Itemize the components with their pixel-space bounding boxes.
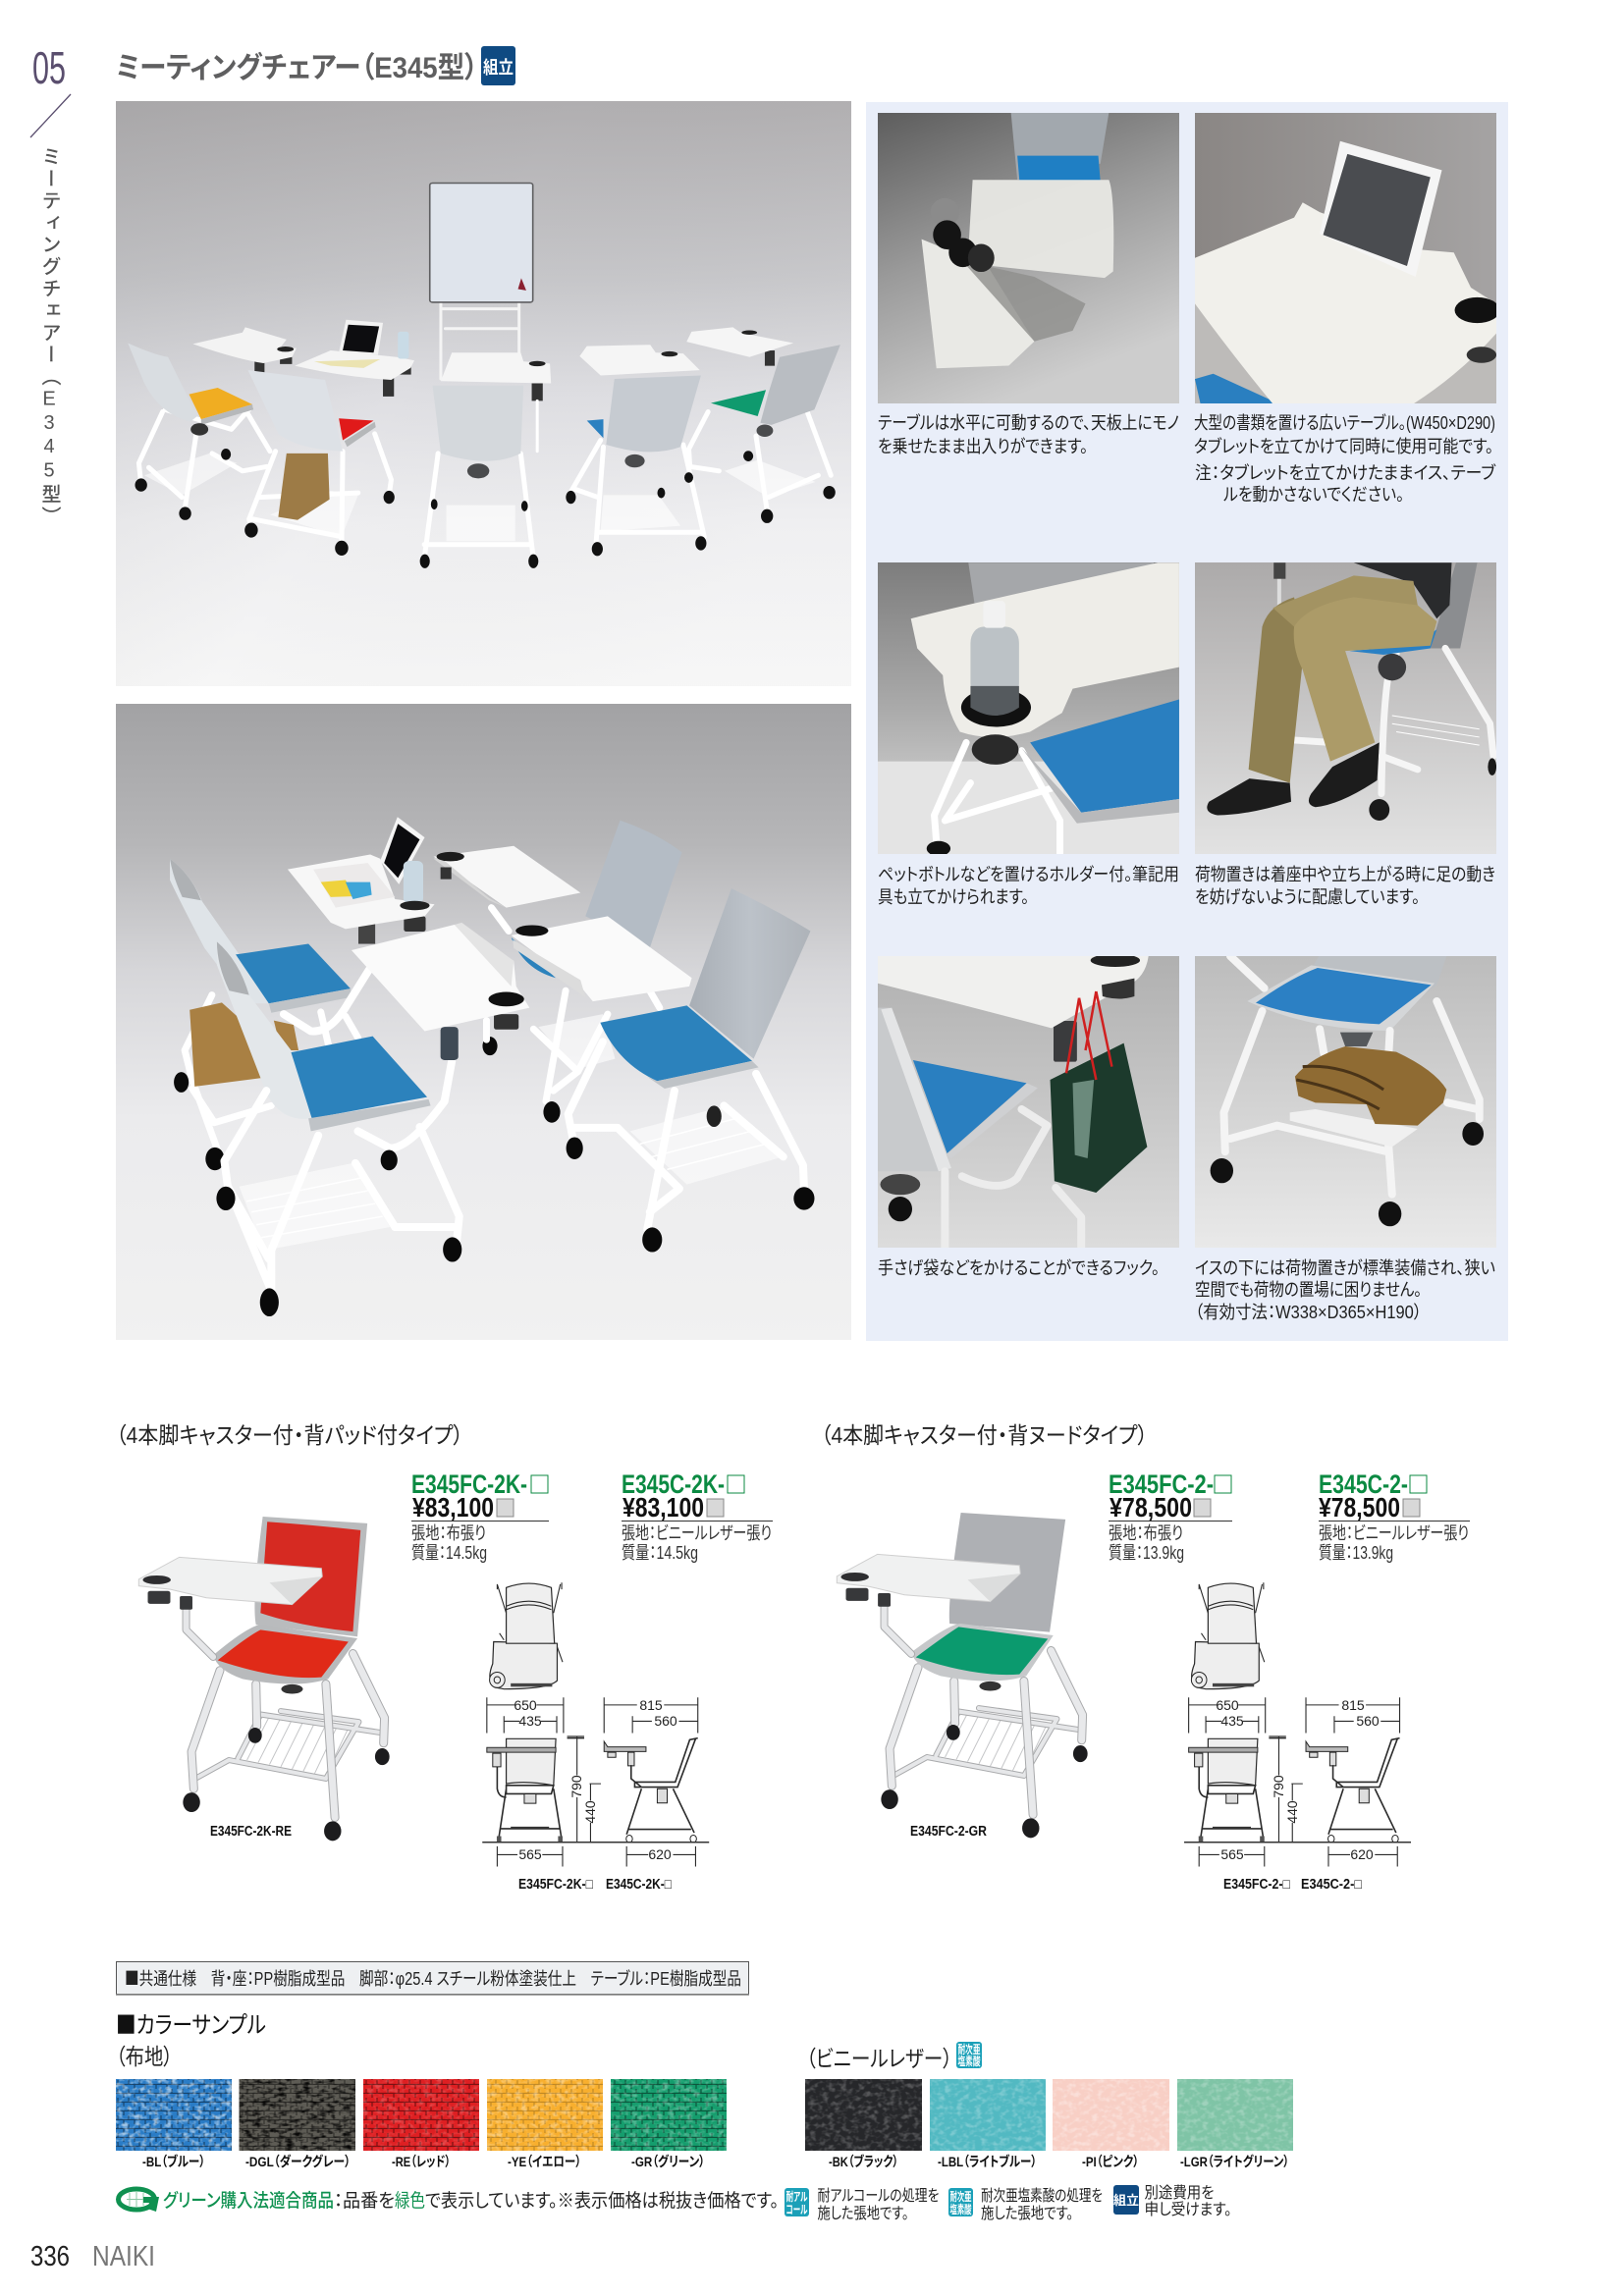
- whiteboard: [430, 184, 533, 379]
- label: padded type drawing codes: E345FC-2K-□: [518, 1877, 593, 1893]
- swatch: pink: [1053, 2079, 1169, 2151]
- section number 05: 05: [32, 42, 66, 93]
- badge: alcohol resistant: 耐アル: [785, 2190, 808, 2204]
- technical drawing: padded type: 620: [648, 1846, 672, 1862]
- section divider slash: [30, 94, 71, 137]
- page number: 336: [30, 2241, 70, 2272]
- swatch labels: vinyl leather: [829, 2154, 1289, 2169]
- swatches: fabric: [116, 2079, 727, 2151]
- swatch labels: fabric: -RE（レッド）: [392, 2154, 451, 2169]
- photo: chairs in a circle with whiteboard: [116, 101, 851, 686]
- caption: sliding table: を乗せたまま出入りができます。: [878, 437, 1088, 456]
- caption: hook: 手さげ袋などをかけることができるフック。: [878, 1258, 1160, 1278]
- product E345C-2: ¥78,500: [1319, 1492, 1400, 1522]
- note: hypochlorite resistant: 施した張地です。: [981, 2205, 1073, 2222]
- badge: hypochlorite resistant legend: [948, 2188, 973, 2216]
- badge: assembly: 組立: [483, 58, 514, 78]
- detail photo: wide table with tablet: [1195, 113, 1500, 403]
- badge: assembly legend: 組立: [1113, 2193, 1139, 2208]
- swatch: red: [363, 2079, 479, 2151]
- product photo: red chair: [138, 1517, 390, 1841]
- technical drawing: padded type: 650: [514, 1697, 537, 1713]
- caption: wide table: タブレットを立てかけて同時に使用可能です。: [1194, 436, 1493, 456]
- technical drawing: padded type: 440: [582, 1800, 598, 1824]
- front right chair: [567, 888, 815, 1253]
- technical drawing: nude type: 565: [1220, 1846, 1244, 1862]
- caption: luggage rack clearance: を妨げないように配慮しています。: [1195, 887, 1420, 907]
- chair centre: [420, 352, 551, 568]
- caption: wide table: [1194, 412, 1496, 505]
- product E345FC-2: 質量：13.9kg: [1109, 1543, 1184, 1563]
- detail photo: under-seat luggage rack: [1195, 956, 1496, 1248]
- label: nude type drawing codes: E345C-2-□: [1301, 1877, 1362, 1893]
- note: hypochlorite resistant: [981, 2187, 1103, 2222]
- technical drawing: padded type: 560: [654, 1713, 677, 1729]
- swatch labels: fabric: -YE（イエロー）: [508, 2154, 581, 2169]
- common specification bar: [116, 1961, 749, 1995]
- badge: alcohol resistant: [785, 2188, 809, 2216]
- caption: sliding table: [878, 412, 1179, 456]
- badge: assembly legend: [1113, 2185, 1139, 2215]
- common specification bar: ■共通仕様 背・座：PP樹脂成型品 脚部：φ25.4 スチール粉体塗装仕上 テーブル：PE樹脂成型品: [125, 1965, 741, 1991]
- caption: luggage rack: イスの下には荷物置きが標準装備され、狭い: [1195, 1258, 1495, 1278]
- swatch labels: vinyl leather: -PI（ピンク）: [1082, 2154, 1139, 2169]
- swatch labels: vinyl leather: -BK（ブラック）: [829, 2154, 898, 2169]
- technical drawing: nude type: 650: [1216, 1697, 1239, 1713]
- swatches: vinyl leather: [805, 2079, 1293, 2151]
- swatch labels: fabric: -DGL（ダークグレー）: [245, 2154, 351, 2169]
- note: assembly: [1145, 2184, 1231, 2218]
- product E345C-2K: E345C-2K-: [622, 1469, 725, 1499]
- product E345FC-2K: E345FC-2K-: [411, 1469, 527, 1499]
- heading: padded back type: （4本脚キャスター付・背パッド付タイプ）: [116, 1422, 463, 1448]
- detail photo: legroom: [1195, 562, 1496, 854]
- table with tablet: [288, 817, 435, 944]
- green purchasing note: グリーン購入法適合商品: [163, 2190, 334, 2212]
- note: assembly: 申し受けます。: [1145, 2201, 1231, 2218]
- panel: feature details: [866, 102, 1508, 1341]
- caption: sliding table: テーブルは水平に可動するので、天板上にモノ: [878, 412, 1179, 433]
- green purchasing note: 緑色: [395, 2190, 425, 2212]
- caption: luggage rack clearance: 荷物置きは着座中や立ち上がる時に足の動き: [1195, 865, 1495, 884]
- product E345C-2: [1319, 1469, 1470, 1563]
- product E345FC-2K: [411, 1469, 549, 1563]
- green purchasing note: [163, 2190, 779, 2212]
- note: hypochlorite resistant: 耐次亜塩素酸の処理を: [981, 2187, 1103, 2205]
- label: green chair code: E345FC-2-GR: [910, 1824, 987, 1840]
- technical drawing: padded type: 435: [518, 1713, 542, 1729]
- green purchasing note: で表示しています。※表示価格は税抜き価格です。: [425, 2190, 779, 2212]
- heading: vinyl leather: （ビニールレザー）: [806, 2046, 952, 2071]
- heading: fabric: （布地）: [116, 2044, 173, 2069]
- icon: green purchasing logo: [118, 2189, 159, 2212]
- caption: luggage rack: （有効寸法：W338×D365×H190）: [1195, 1303, 1422, 1322]
- badge: hypochlorite resistant legend: 塩素酸: [950, 2202, 972, 2216]
- product E345FC-2K: 張地：布張り: [411, 1523, 486, 1543]
- product photo: green chair: [837, 1513, 1088, 1838]
- swatch: blue: [116, 2079, 232, 2151]
- technical drawing: padded type: [482, 1582, 709, 1866]
- technical drawing: nude type: [1184, 1582, 1411, 1866]
- swatch labels: fabric: [142, 2154, 705, 2169]
- caption: luggage rack: 空間でも荷物の置場に困りません。: [1195, 1280, 1422, 1300]
- caption: wide table: ルを動かさないでください。: [1223, 485, 1404, 505]
- technical drawing: nude type: 435: [1220, 1713, 1244, 1729]
- heading: colour samples: ■カラーサンプル: [116, 2005, 266, 2040]
- swatch: yellow: [487, 2079, 603, 2151]
- badge: hypochlorite resistant: 耐次亜: [958, 2042, 980, 2056]
- product E345FC-2K: 質量：14.5kg: [411, 1543, 487, 1563]
- detail photo: bottle holder: [878, 562, 1179, 856]
- caption: wide table: 大型の書類を置ける広いテーブル。(W450×D290): [1194, 412, 1495, 433]
- badge: hypochlorite resistant: 塩素酸: [958, 2054, 980, 2068]
- caption: bottle holder: [878, 865, 1179, 907]
- product E345C-2K: [622, 1469, 773, 1563]
- note: alcohol resistant: 施した張地です。: [817, 2205, 909, 2222]
- technical drawing: nude type: 620: [1350, 1846, 1374, 1862]
- heading: nude back type: （4本脚キャスター付・背ヌードタイプ）: [821, 1422, 1148, 1448]
- detail photo: bag hook: [878, 954, 1179, 1248]
- green purchasing note: ：品番を: [334, 2190, 395, 2212]
- caption: luggage rack clearance: [1195, 865, 1495, 907]
- product E345C-2K: 質量：14.5kg: [622, 1543, 698, 1563]
- product E345FC-2: ¥78,500: [1110, 1492, 1192, 1522]
- badge: alcohol resistant: コール: [785, 2203, 808, 2216]
- product E345C-2: E345C-2-: [1319, 1469, 1408, 1499]
- chair green: [684, 327, 840, 523]
- brand name: NAIKI: [92, 2241, 155, 2272]
- detail photo: sliding table: [878, 113, 1179, 403]
- product E345FC-2: 張地：布張り: [1109, 1523, 1183, 1543]
- swatch labels: vinyl leather: -LGR（ライトグリーン）: [1180, 2154, 1289, 2169]
- technical drawing: padded type: 565: [518, 1846, 542, 1862]
- badge: assembly: [481, 46, 515, 85]
- chair blue: [566, 345, 706, 556]
- label: nude type drawing codes: [1223, 1877, 1362, 1893]
- product E345C-2K: 張地：ビニールレザー張り: [622, 1523, 772, 1543]
- front left chair: [216, 941, 461, 1316]
- right table: [512, 916, 692, 1001]
- swatch: dark grey: [240, 2079, 355, 2151]
- chair red with bag: [244, 320, 414, 556]
- product E345FC-2K: ¥83,100: [412, 1492, 494, 1522]
- label: nude type drawing codes: E345FC-2-□: [1223, 1877, 1290, 1893]
- technical drawing: nude type: 790: [1271, 1775, 1286, 1798]
- far right chair: [486, 821, 681, 1123]
- photo: five chairs from above: [116, 704, 851, 1340]
- product E345FC-2: E345FC-2-: [1109, 1469, 1214, 1499]
- swatch labels: vinyl leather: -LBL（ライトブルー）: [938, 2154, 1037, 2169]
- badge: hypochlorite resistant legend: 耐次亜: [950, 2189, 972, 2204]
- label: padded type drawing codes: E345C-2K-□: [606, 1877, 672, 1893]
- product E345FC-2: [1109, 1469, 1232, 1563]
- caption: luggage rack: [1195, 1258, 1495, 1322]
- swatch: black: [805, 2079, 922, 2151]
- caption: bottle holder: 具も立てかけられます。: [878, 887, 1029, 907]
- caption: wide table: 注：タブレットを立てかけたままイス、テーブ: [1195, 462, 1496, 483]
- label: padded type drawing codes: [518, 1877, 672, 1893]
- vertical section title: ミーティングチェアー（E345型）: [38, 146, 61, 528]
- title: ミーティングチェアー（E345型）: [116, 52, 478, 84]
- product E345C-2: 質量：13.9kg: [1319, 1543, 1393, 1563]
- label: red chair code: E345FC-2K-RE: [210, 1824, 292, 1840]
- product E345C-2K: ¥83,100: [623, 1492, 704, 1522]
- product E345C-2: 張地：ビニールレザー張り: [1319, 1523, 1469, 1543]
- technical drawing: padded type: 790: [568, 1775, 584, 1798]
- technical drawing: nude type: 815: [1341, 1697, 1365, 1713]
- chair yellow: [128, 327, 297, 520]
- note: alcohol resistant: 耐アルコールの処理を: [817, 2187, 940, 2205]
- technical drawing: nude type: 440: [1284, 1800, 1300, 1824]
- centre table: [352, 923, 529, 1060]
- technical drawing: padded type: 815: [639, 1697, 663, 1713]
- note: alcohol resistant: [817, 2187, 940, 2222]
- swatch: light blue: [930, 2079, 1046, 2151]
- swatch: light green: [1177, 2079, 1293, 2151]
- swatch labels: fabric: -BL（ブルー）: [142, 2154, 205, 2169]
- table far right: [434, 846, 580, 932]
- swatch: green: [611, 2079, 727, 2151]
- badge: hypochlorite resistant: [956, 2042, 982, 2068]
- swatch labels: fabric: -GR（グリーン）: [631, 2154, 705, 2169]
- technical drawing: nude type: 560: [1356, 1713, 1380, 1729]
- back left chair: [170, 859, 498, 1170]
- caption: bottle holder: ペットボトルなどを置けるホルダー付。筆記用: [878, 865, 1179, 884]
- note: assembly: 別途費用を: [1145, 2184, 1215, 2202]
- blue seat sliver: [512, 937, 556, 978]
